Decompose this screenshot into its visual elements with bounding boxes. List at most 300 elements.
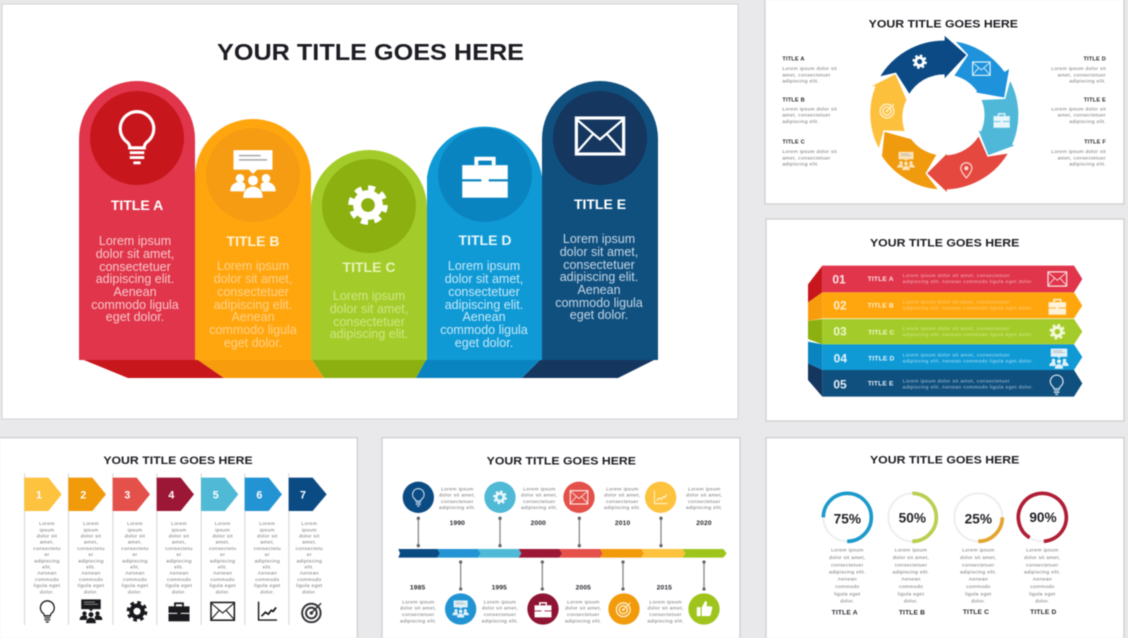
step 4: Aenean bbox=[169, 571, 189, 577]
top notes and years: 2010 bbox=[615, 520, 631, 527]
top notes and years: dolor sit amet, bbox=[521, 493, 557, 499]
milestone: teal gear bbox=[484, 482, 516, 513]
ring: 25 percent: TITLE C bbox=[963, 609, 989, 616]
step 3: er bbox=[132, 552, 138, 558]
step 3: adipiscing bbox=[122, 558, 148, 564]
step 6: dolor. bbox=[260, 589, 274, 595]
top notes and years: Lorem ipsum bbox=[523, 486, 556, 492]
top notes and years: consectetuer bbox=[441, 499, 474, 505]
ribbon 05: adipiscing elit. Aenean commodo ligula eget dolor. bbox=[903, 384, 1033, 390]
step 7: Lorem bbox=[301, 521, 317, 527]
step 1: Lorem bbox=[39, 521, 55, 527]
arrow: blue bbox=[953, 41, 1010, 98]
ring: 50 percent: adipiscing elit. bbox=[893, 570, 929, 576]
ring: 75 percent: Aenean bbox=[838, 577, 857, 583]
step 6: Aenean bbox=[258, 571, 277, 577]
step 2: er bbox=[88, 552, 94, 558]
step 5: ligula eget bbox=[209, 583, 236, 589]
step 2: ipsum bbox=[84, 527, 98, 533]
ring: 50 percent bbox=[888, 493, 936, 617]
top notes and years: consectetuer bbox=[606, 499, 639, 505]
step 1: Aenean bbox=[37, 571, 57, 577]
left labels: adipiscing elit. bbox=[782, 78, 819, 84]
right labels: adipiscing elit. bbox=[1069, 119, 1106, 125]
step 5 bbox=[201, 473, 238, 625]
step 3: 3 bbox=[124, 489, 130, 501]
milestone: maroon briefcase bbox=[527, 593, 559, 625]
bottom notes and years: consectetuer bbox=[484, 612, 516, 618]
top notes and years: dolor sit amet, bbox=[686, 493, 722, 499]
top notes and years: dolor sit amet, bbox=[439, 493, 475, 499]
text B: consectetuer bbox=[217, 285, 289, 299]
ring: 25 percent: consectetuer bbox=[962, 562, 995, 568]
ring: 50 percent: Lorem ipsum bbox=[895, 548, 927, 554]
ring: 50 percent: Aenean bbox=[901, 577, 921, 583]
right labels: amet, consectetuer bbox=[1058, 155, 1106, 161]
ring: 25 percent: adipiscing elit. bbox=[960, 570, 997, 576]
text C: adipiscing elit. bbox=[330, 327, 408, 341]
step 6: 6 bbox=[256, 489, 262, 501]
panel: progress rings bbox=[766, 438, 1124, 638]
icon: cycle pin bbox=[961, 163, 972, 178]
step 1: dolor sit bbox=[37, 533, 58, 539]
ribbon 02: 02 bbox=[833, 299, 847, 313]
bottom notes and years: Lorem ipsum bbox=[484, 599, 516, 605]
ring: 90 percent: Aenean bbox=[1033, 577, 1052, 583]
ribbon 02 bbox=[808, 292, 1082, 321]
step 4: commodo bbox=[167, 577, 191, 583]
step 1: amet, bbox=[40, 540, 54, 546]
step 3: ipsum bbox=[128, 527, 142, 533]
right labels: Lorem ipsum dolor sit bbox=[1051, 66, 1106, 72]
heading: cycle title: YOUR TITLE GOES HERE bbox=[869, 18, 1018, 30]
arrow: yellow bbox=[868, 73, 908, 150]
bottom notes and years: dolor sit amet, bbox=[482, 606, 518, 612]
panel: five rounded columns bbox=[2, 4, 738, 419]
step 3: ligula eget bbox=[122, 583, 148, 589]
ring: 50 percent: consectetuer bbox=[895, 562, 927, 568]
ring: 75 percent: dolor. bbox=[840, 598, 854, 604]
ring: 25 percent: dolor. bbox=[971, 598, 985, 604]
step 7: ipsum bbox=[302, 527, 317, 533]
top notes and years: 2020 bbox=[696, 520, 712, 527]
text A: Aenean bbox=[113, 285, 157, 299]
milestone: blue people bbox=[445, 593, 476, 625]
step 5: consectetu bbox=[209, 546, 236, 552]
arrow: navy bbox=[879, 34, 967, 95]
step 4: dolor. bbox=[172, 589, 186, 595]
ring: 90 percent: dolor sit amet, bbox=[1024, 555, 1060, 561]
milestone: navy bulb bbox=[403, 482, 434, 513]
ribbon 01: TITLE A bbox=[868, 276, 894, 283]
heading: ribbons title: YOUR TITLE GOES HERE bbox=[870, 238, 1019, 250]
ribbon 03: TITLE C bbox=[868, 329, 895, 336]
step 5: Lorem bbox=[215, 521, 231, 527]
step 5: elit. bbox=[218, 565, 227, 571]
ring: 25 percent: commodo bbox=[966, 584, 990, 590]
step 7: Aenean bbox=[300, 571, 319, 577]
text B: adipiscing elit. bbox=[214, 298, 292, 312]
panel: circular arrows bbox=[765, 0, 1124, 204]
ribbon 01 bbox=[808, 266, 1082, 302]
step 7: dolor. bbox=[302, 589, 316, 595]
text E: consectetuer bbox=[563, 258, 635, 272]
bottom notes and years: consectetuer bbox=[402, 612, 435, 618]
step 4: consectetu bbox=[165, 546, 193, 552]
ring: 50 percent: commodo bbox=[899, 584, 923, 590]
bottom notes and years: adipiscing elit. bbox=[647, 618, 684, 624]
step 7: commodo bbox=[297, 577, 321, 583]
text B: eget dolor. bbox=[224, 336, 282, 350]
text E: Aenean bbox=[577, 283, 621, 297]
step 3: Lorem bbox=[127, 521, 143, 527]
left labels: TITLE C bbox=[782, 140, 805, 146]
bottom notes and years: Lorem ipsum bbox=[402, 599, 435, 605]
ring: 90 percent: consectetuer bbox=[1026, 562, 1059, 568]
bottom notes and years: dolor sit amet, bbox=[400, 606, 436, 612]
ring: 75 percent: consectetuer bbox=[831, 562, 864, 568]
ribbon 04: Lorem ipsum dolor sit amet, consectetuer bbox=[903, 353, 1010, 359]
step 1: er bbox=[44, 552, 50, 558]
text D: Lorem ipsum bbox=[448, 259, 520, 273]
step 2: elit. bbox=[86, 565, 96, 571]
bottom notes and years: adipiscing elit. bbox=[482, 618, 518, 624]
step 4: amet, bbox=[172, 540, 186, 546]
arrow: teal bbox=[977, 79, 1019, 156]
column bases bbox=[79, 358, 658, 378]
top notes and years: 1990 bbox=[450, 520, 465, 527]
right labels: adipiscing elit. bbox=[1069, 78, 1106, 84]
step 7: er bbox=[307, 552, 312, 558]
text C: dolor sit amet, bbox=[330, 302, 408, 316]
ribbon 02: TITLE B bbox=[868, 302, 894, 309]
top notes and years: consectetuer bbox=[688, 499, 721, 505]
column: Title D bbox=[427, 127, 542, 360]
top notes and years: Lorem ipsum bbox=[606, 486, 639, 492]
step 6: ipsum bbox=[260, 527, 275, 533]
step 5: adipiscing bbox=[210, 558, 235, 564]
ring: 25 percent: 25% bbox=[965, 511, 992, 526]
step 2: Aenean bbox=[81, 571, 101, 577]
step 6 bbox=[244, 473, 282, 625]
text B: dolor sit amet, bbox=[214, 272, 292, 286]
icon: audience bbox=[230, 150, 276, 198]
ring: 25 percent: ligula eget bbox=[965, 591, 992, 597]
text A: adipiscing elit. bbox=[96, 272, 174, 286]
step 4 bbox=[156, 473, 194, 625]
step 2: consectetu bbox=[77, 546, 105, 552]
text D: Aenean bbox=[462, 310, 506, 324]
connectors bbox=[417, 517, 706, 591]
top notes and years: Lorem ipsum bbox=[441, 486, 474, 492]
right labels: Lorem ipsum dolor sit bbox=[1051, 106, 1106, 112]
step 3 bbox=[112, 473, 150, 625]
left labels: Lorem ipsum dolor sit bbox=[782, 106, 837, 112]
ring: 50 percent: ligula eget bbox=[898, 591, 924, 597]
heading: rings title: YOUR TITLE GOES HERE bbox=[870, 455, 1019, 467]
icon: cycle target bbox=[880, 104, 894, 118]
step 6: elit. bbox=[263, 565, 272, 571]
right labels: Lorem ipsum dolor sit bbox=[1051, 149, 1106, 155]
step 6: consectetu bbox=[254, 546, 281, 552]
step 4: elit. bbox=[174, 565, 184, 571]
left labels: TITLE A bbox=[782, 57, 805, 63]
step 7: amet, bbox=[302, 540, 316, 546]
text E: commodo ligula bbox=[555, 296, 643, 310]
left labels bbox=[782, 57, 837, 167]
ring: 50 percent: dolor. bbox=[904, 598, 918, 604]
ring: 75 percent: Lorem ipsum bbox=[831, 548, 864, 554]
text E: dolor sit amet, bbox=[560, 245, 638, 259]
bottom notes and years: consectetuer bbox=[567, 612, 600, 618]
text A: consectetuer bbox=[99, 260, 171, 274]
ring: 25 percent: Aenean bbox=[969, 577, 988, 583]
text D: dolor sit amet, bbox=[445, 272, 523, 286]
bottom notes and years: dolor sit amet, bbox=[565, 606, 601, 612]
column: Title A bbox=[79, 81, 195, 360]
panel: stacked ribbons bbox=[766, 219, 1124, 421]
bottom notes and years: 2005 bbox=[576, 584, 591, 591]
top notes and years: 2000 bbox=[531, 520, 546, 527]
step 4: adipiscing bbox=[166, 558, 192, 564]
step 3: dolor. bbox=[128, 589, 142, 595]
ring: 90 percent: commodo bbox=[1030, 584, 1054, 590]
ring: 25 percent: Lorem ipsum bbox=[962, 548, 995, 554]
right labels bbox=[1051, 57, 1106, 167]
step 2: Lorem bbox=[83, 521, 99, 527]
bottom notes and years: adipiscing elit. bbox=[400, 618, 437, 624]
bottom notes and years bbox=[400, 584, 684, 624]
ring: 75 percent: commodo bbox=[835, 584, 859, 590]
step 1: elit. bbox=[42, 565, 52, 571]
step 4: ipsum bbox=[172, 527, 186, 533]
heading: pointers title: YOUR TITLE GOES HERE bbox=[103, 455, 253, 467]
left labels: adipiscing elit. bbox=[782, 161, 819, 167]
column: Title B bbox=[195, 119, 311, 360]
step 3: elit. bbox=[130, 565, 140, 571]
step 2: 2 bbox=[80, 489, 86, 501]
ribbon 04: adipiscing elit. Aenean commodo ligula eget dolor. bbox=[903, 359, 1033, 365]
ring: 90 percent: Lorem ipsum bbox=[1026, 548, 1059, 554]
text A: Lorem ipsum bbox=[99, 234, 171, 248]
step 4: dolor sit bbox=[169, 533, 190, 539]
step 1: 1 bbox=[36, 489, 42, 501]
ring: 75 percent: 75% bbox=[834, 511, 861, 526]
left labels: Lorem ipsum dolor sit bbox=[782, 149, 837, 155]
left labels: amet, consectetuer bbox=[782, 155, 831, 161]
step 5: ipsum bbox=[215, 527, 230, 533]
text D: eget dolor. bbox=[455, 336, 513, 350]
step 6: er bbox=[265, 552, 270, 558]
step 1: consectetu bbox=[33, 546, 61, 552]
top notes and years bbox=[439, 486, 723, 527]
ribbon 02: Lorem ipsum dolor sit amet, consectetuer bbox=[903, 299, 1010, 305]
ring: 90 percent: dolor. bbox=[1035, 598, 1049, 604]
left labels: adipiscing elit. bbox=[782, 119, 819, 125]
step 6: amet, bbox=[260, 540, 274, 546]
right labels: TITLE E bbox=[1084, 97, 1106, 103]
ring: 50 percent: TITLE B bbox=[899, 610, 925, 617]
ribbon 04 bbox=[808, 342, 1082, 370]
arrow: orange bbox=[880, 131, 939, 190]
step 7: 7 bbox=[300, 489, 306, 501]
top notes and years: adipiscing elit. bbox=[439, 505, 476, 511]
bottom notes and years: dolor sit amet, bbox=[648, 606, 684, 612]
right labels: amet, consectetuer bbox=[1058, 113, 1106, 119]
step 3: Aenean bbox=[125, 571, 145, 577]
ring: 75 percent: adipiscing elit. bbox=[829, 570, 866, 576]
icon: cycle envelope bbox=[973, 62, 990, 75]
text C: consectetuer bbox=[333, 315, 405, 329]
ribbon 05: TITLE E bbox=[868, 380, 894, 387]
right labels: amet, consectetuer bbox=[1058, 72, 1106, 78]
ribbon 01: 01 bbox=[832, 272, 846, 286]
step 1: dolor. bbox=[40, 589, 54, 595]
step 7: ligula eget bbox=[296, 583, 323, 589]
text D: adipiscing elit. bbox=[445, 298, 523, 312]
column: Title C bbox=[311, 150, 427, 360]
step 5: Aenean bbox=[213, 571, 232, 577]
text A: commodo ligula bbox=[91, 298, 179, 312]
text D: consectetuer bbox=[448, 285, 520, 299]
milestone: red envelope bbox=[563, 482, 595, 513]
top notes and years: adipiscing elit. bbox=[604, 505, 641, 511]
step 1: commodo bbox=[35, 577, 59, 583]
ribbon 05: Lorem ipsum dolor sit amet, consectetuer bbox=[903, 378, 1010, 384]
step 2: dolor sit bbox=[81, 533, 102, 539]
left labels: amet, consectetuer bbox=[782, 113, 831, 119]
title E: TITLE E bbox=[574, 196, 626, 212]
step 5: dolor. bbox=[216, 589, 230, 595]
top notes and years: adipiscing elit. bbox=[686, 505, 723, 511]
text A: eget dolor. bbox=[106, 310, 164, 324]
ring: 75 percent: ligula eget bbox=[834, 591, 861, 597]
step 2: ligula eget bbox=[78, 583, 104, 589]
title D: TITLE D bbox=[459, 232, 511, 248]
ribbon 01: Lorem ipsum dolor sit amet, consectetuer bbox=[903, 273, 1010, 279]
step 2: dolor. bbox=[84, 589, 98, 595]
step 7: dolor sit bbox=[299, 533, 320, 539]
left labels: TITLE B bbox=[782, 97, 805, 103]
step 3: commodo bbox=[123, 577, 147, 583]
text E: eget dolor. bbox=[570, 308, 628, 322]
top notes and years: Lorem ipsum bbox=[688, 486, 721, 492]
title A: TITLE A bbox=[111, 197, 163, 213]
left labels: amet, consectetuer bbox=[782, 72, 831, 78]
step 3: amet, bbox=[128, 540, 142, 546]
bottom notes and years: Lorem ipsum bbox=[649, 599, 682, 605]
icon: gear bbox=[351, 188, 385, 222]
heading: main title: YOUR TITLE GOES HERE bbox=[217, 39, 524, 65]
ring: 75 percent: dolor sit amet, bbox=[829, 555, 865, 561]
bottom notes and years: consectetuer bbox=[649, 612, 682, 618]
cycle diagram bbox=[868, 34, 1019, 194]
step 2: amet, bbox=[84, 540, 98, 546]
ribbon 05 bbox=[808, 363, 1082, 397]
column: Title E bbox=[542, 81, 658, 360]
panel: seven pointer columns bbox=[0, 438, 357, 638]
step 4: 4 bbox=[168, 489, 174, 501]
step 1: ligula eget bbox=[34, 583, 60, 589]
step 4: Lorem bbox=[171, 521, 187, 527]
step 4: er bbox=[176, 552, 182, 558]
step 6: Lorem bbox=[259, 521, 275, 527]
timeline bar bbox=[398, 549, 727, 558]
step 7: consectetu bbox=[296, 546, 323, 552]
ribbon 04: 04 bbox=[834, 351, 847, 365]
step 6: ligula eget bbox=[254, 583, 281, 589]
ribbon 03: 03 bbox=[833, 325, 847, 339]
bottom notes and years: 2015 bbox=[657, 584, 672, 591]
step 2: commodo bbox=[79, 577, 103, 583]
step 5: dolor sit bbox=[212, 533, 233, 539]
step 1: ipsum bbox=[40, 527, 54, 533]
step 5: 5 bbox=[213, 489, 219, 501]
step 6: adipiscing bbox=[255, 558, 280, 564]
ribbon 03: Lorem ipsum dolor sit amet, consectetuer bbox=[903, 326, 1010, 332]
icon: briefcase bbox=[462, 159, 508, 198]
text C: Lorem ipsum bbox=[333, 289, 405, 303]
step 7 bbox=[288, 473, 327, 625]
ribbon 01: adipiscing elit. Aenean commodo ligula eget dolor. bbox=[903, 279, 1033, 285]
icon: envelope bbox=[576, 118, 624, 154]
bottom notes and years: 1985 bbox=[410, 584, 426, 591]
ring: 90 percent: adipiscing elit. bbox=[1024, 570, 1061, 576]
step 2 bbox=[68, 473, 106, 625]
icon: cycle briefcase bbox=[993, 114, 1010, 128]
right labels: TITLE F bbox=[1084, 140, 1106, 146]
step 2: adipiscing bbox=[78, 558, 104, 564]
right labels: adipiscing elit. bbox=[1069, 161, 1106, 167]
ribbon 05: 05 bbox=[833, 378, 847, 392]
step 3: dolor sit bbox=[125, 533, 146, 539]
ring: 75 percent bbox=[823, 493, 871, 617]
step 5: commodo bbox=[211, 577, 235, 583]
text E: Lorem ipsum bbox=[563, 232, 635, 246]
ring: 50 percent: dolor sit amet, bbox=[893, 555, 929, 561]
title B: TITLE B bbox=[227, 233, 279, 249]
ring: 50 percent: 50% bbox=[899, 511, 926, 526]
step 7: elit. bbox=[305, 565, 314, 571]
milestone: orange target bbox=[608, 593, 640, 625]
title C: TITLE C bbox=[343, 259, 395, 275]
step 7: adipiscing bbox=[297, 558, 322, 564]
text B: commodo ligula bbox=[209, 323, 297, 337]
ring: 25 percent: dolor sit amet, bbox=[960, 555, 996, 561]
ring: 90 percent: 90% bbox=[1029, 510, 1057, 525]
icon: cycle people bbox=[897, 152, 915, 170]
ribbon 04: TITLE D bbox=[868, 355, 895, 362]
step 6: commodo bbox=[255, 577, 279, 583]
step 5: er bbox=[220, 552, 225, 558]
milestone: yellow chart bbox=[645, 482, 676, 513]
text A: dolor sit amet, bbox=[96, 247, 174, 261]
milestone: green thumb bbox=[688, 593, 720, 625]
icon: light bulb bbox=[120, 112, 154, 163]
left labels: Lorem ipsum dolor sit bbox=[782, 66, 837, 72]
step 6: dolor sit bbox=[257, 533, 278, 539]
step 1: adipiscing bbox=[34, 558, 60, 564]
bottom notes and years: 1995 bbox=[492, 584, 507, 591]
ring: 90 percent: TITLE D bbox=[1030, 609, 1057, 616]
ribbon 03 bbox=[808, 319, 1082, 344]
bottom notes and years: adipiscing elit. bbox=[565, 618, 602, 624]
bottom notes and years: Lorem ipsum bbox=[567, 599, 600, 605]
text D: commodo ligula bbox=[440, 323, 528, 337]
ring: 90 percent bbox=[1009, 484, 1075, 616]
arrow: red bbox=[926, 135, 1009, 194]
text B: Lorem ipsum bbox=[217, 259, 289, 273]
